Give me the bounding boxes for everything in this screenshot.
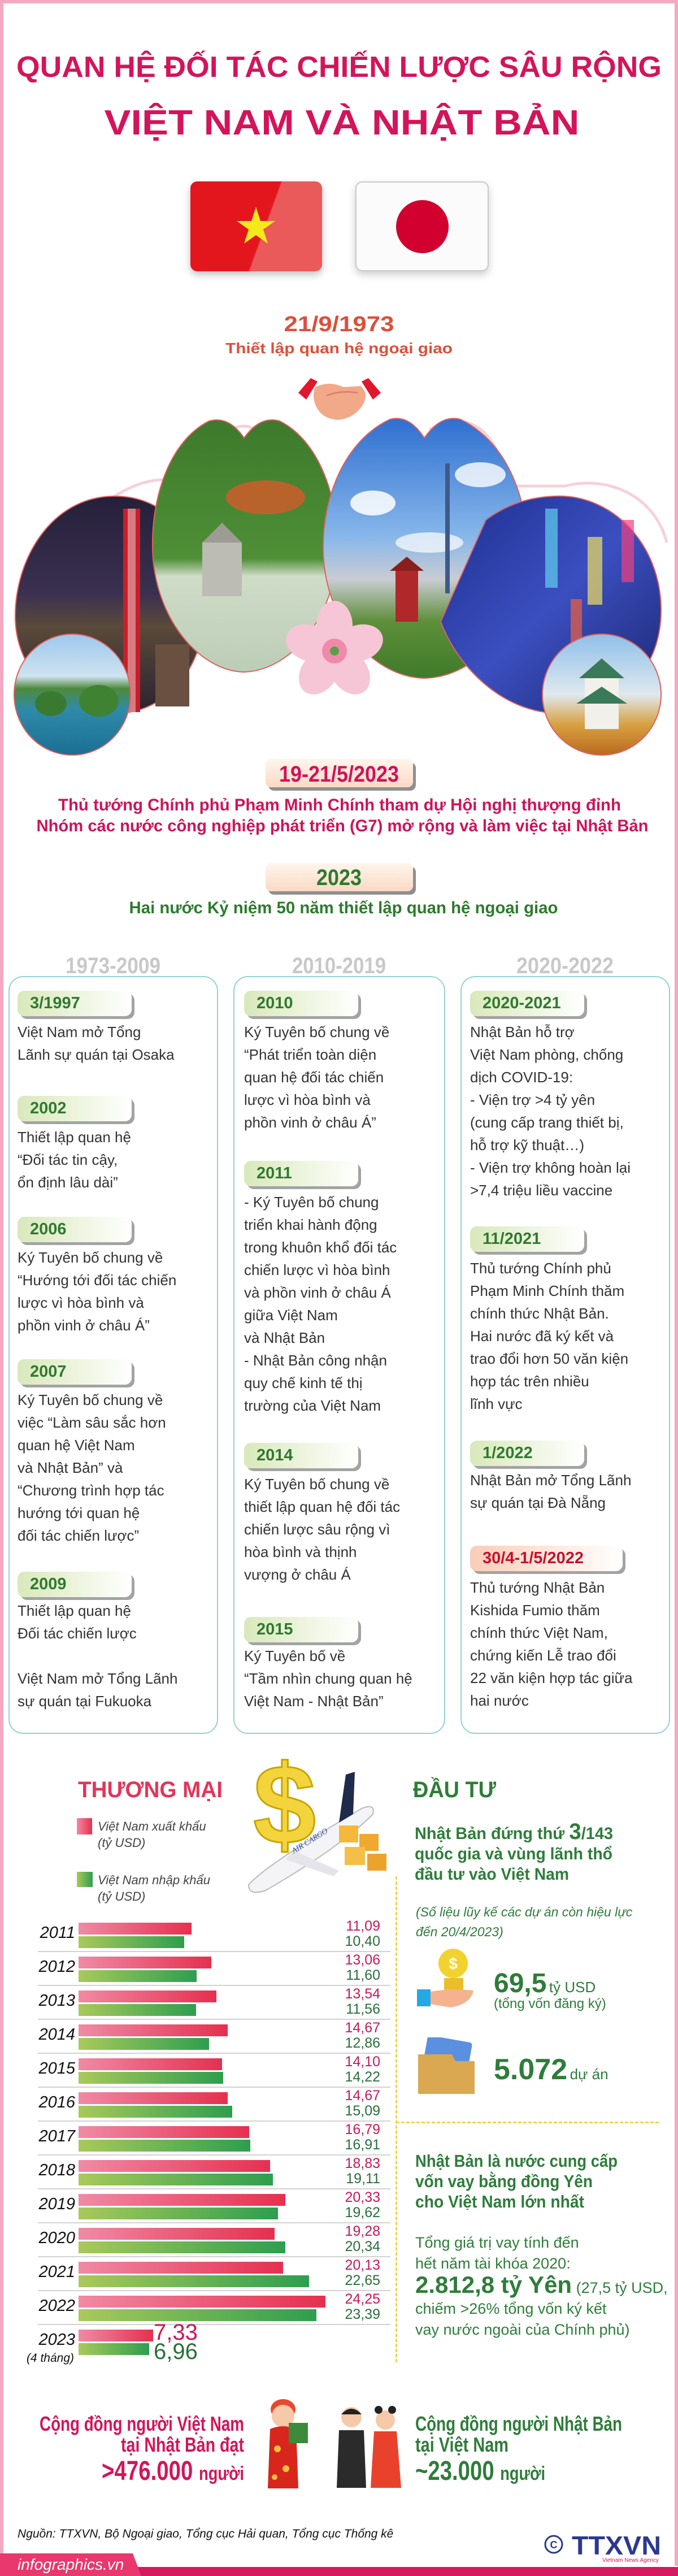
bar chart: trade: 18,83 bbox=[345, 2156, 380, 2171]
photo: Ha Long bay bbox=[14, 634, 131, 755]
text: ODA headline bbox=[415, 2151, 618, 2210]
text: ODA value: vay nước ngoài của Chính phủ) bbox=[415, 2321, 630, 2338]
bar chart: trade: 20,13 bbox=[345, 2257, 380, 2273]
stat: registered capital bbox=[494, 1968, 606, 2011]
event: 2011: 2011 bbox=[257, 1164, 292, 1182]
text: “Đối tác tin cậy, bbox=[18, 1151, 118, 1168]
text: anniversary: Hai nước Kỷ niệm 50 năm thiết lập quan hệ ngoại giao bbox=[129, 899, 558, 917]
legend: import: Việt Nam nhập khẩu bbox=[98, 1873, 210, 1887]
text: và Nhật Bản” và bbox=[18, 1459, 123, 1476]
bar chart: trade: 14,10 bbox=[345, 2054, 380, 2070]
event: 2010 bbox=[244, 991, 358, 1016]
event: 1/2022 bbox=[470, 1441, 584, 1466]
text: Japanese community in Vietnam bbox=[415, 2412, 622, 2484]
panel: 1973-2009 bbox=[8, 976, 218, 1734]
bar chart: trade: 2015 bbox=[38, 2059, 75, 2078]
bar chart: trade: 20,33 bbox=[345, 2189, 380, 2205]
text: ODA value: chiếm >26% tổng vốn ký kết bbox=[415, 2300, 606, 2317]
text: >7,4 triệu liều vaccine bbox=[470, 1182, 612, 1199]
text: “Chương trình hợp tác bbox=[18, 1482, 164, 1499]
text: Ký Tuyên bố chung về bbox=[18, 1249, 163, 1266]
event: 2007: 2007 bbox=[30, 1363, 67, 1381]
text: việc “Làm sâu sắc hơn bbox=[18, 1414, 166, 1431]
event: 2014: 2014 bbox=[257, 1446, 293, 1464]
source note: Nguồn: TTXVN, Bộ Ngoại giao, Tổng cục Hải quan, Tổng cục Thống kê bbox=[18, 2527, 393, 2540]
legend: export: Việt Nam xuất khẩu bbox=[98, 1819, 206, 1833]
text: ODA value: 2.812,8 tỷ Yên (27,5 tỷ USD, bbox=[415, 2271, 668, 2298]
bar chart: trade: 2020 bbox=[38, 2229, 75, 2247]
event: 2007 bbox=[18, 1359, 132, 1385]
bar chart: trade: 2018 bbox=[38, 2161, 75, 2179]
text: hỗ trợ kỹ thuật…) bbox=[470, 1137, 584, 1153]
text: trường của Việt Nam bbox=[244, 1397, 381, 1414]
text: ổn định lâu dài” bbox=[18, 1174, 118, 1191]
text: Việt Nam phòng, chống bbox=[470, 1046, 623, 1063]
text: Ký Tuyên bố về bbox=[244, 1647, 345, 1664]
bar chart: trade: 22,65 bbox=[345, 2273, 380, 2288]
separators bbox=[38, 1951, 390, 1952]
bar chart: trade: 2023 bbox=[38, 2331, 75, 2349]
logo: TTXVN bbox=[545, 2532, 661, 2564]
flag: Vietnam bbox=[190, 181, 322, 271]
icon: coins in hand bbox=[417, 1949, 473, 2007]
text: Việt Nam mở Tổng Lãnh bbox=[18, 1670, 177, 1687]
text: G7 summit description: Thủ tướng Chính phủ Phạm Minh Chính tham dự Hội nghị thượng đỉnh bbox=[58, 796, 621, 814]
bar chart: trade bbox=[27, 1918, 390, 2365]
text: - Viện trợ không hoàn lại bbox=[470, 1159, 631, 1176]
logo: TTXVN: C bbox=[550, 2539, 557, 2551]
text: sự quán tại Fukuoka bbox=[18, 1693, 151, 1710]
icon: coins in hand: $ bbox=[449, 1955, 458, 1972]
timeline period headings bbox=[66, 953, 614, 978]
bar chart: trade: 2013 bbox=[38, 1992, 75, 2010]
text: vượng ở châu Á bbox=[244, 1566, 351, 1583]
event: 2009: 2009 bbox=[30, 1575, 67, 1593]
event: 2010: 2010 bbox=[257, 994, 293, 1012]
bar chart: trade: 12,86 bbox=[345, 2035, 380, 2051]
title bbox=[16, 50, 662, 142]
text: Ký Tuyên bố chung về bbox=[244, 1476, 389, 1493]
photo collage bbox=[14, 418, 668, 756]
text: lược vì hòa bình và bbox=[18, 1294, 144, 1311]
note: cumulative data: (Số liệu lũy kế các dự án còn hiệu lực bbox=[416, 1905, 632, 1919]
text: thiết lập quan hệ đối tác bbox=[244, 1498, 400, 1515]
text: “Hướng tới đối tác chiến bbox=[18, 1272, 176, 1289]
text: quy chế kinh tế thị bbox=[244, 1374, 363, 1391]
title: QUAN HỆ ĐỐI TÁC CHIẾN LƯỢC SÂU RỘNG bbox=[16, 50, 662, 84]
photo: Tokyo skyline bbox=[323, 418, 527, 678]
stat: projects: 5.072 dự án bbox=[494, 2053, 609, 2086]
text: Ký Tuyên bố chung về bbox=[18, 1391, 163, 1408]
text: Japan rank bbox=[415, 1819, 613, 1882]
bar chart: trade: 2014 bbox=[38, 2026, 75, 2044]
text: lược vì hòa bình và bbox=[244, 1091, 371, 1108]
text: giữa Việt Nam bbox=[244, 1307, 338, 1324]
photo: Hanoi Hoan Kiem bbox=[153, 420, 337, 672]
divider lines: investment bbox=[395, 1876, 397, 2362]
text: quan hệ Việt Nam bbox=[18, 1437, 135, 1454]
text: Hai nước đã ký kết và bbox=[470, 1328, 614, 1345]
text: ODA headline: vốn vay bằng đồng Yên bbox=[415, 2171, 593, 2191]
panel: 2010-2019 bbox=[233, 976, 445, 1734]
event: 2002 bbox=[18, 1096, 132, 1121]
bar chart: trade: 11,56 bbox=[346, 2001, 380, 2017]
event: 2002: 2002 bbox=[30, 1099, 67, 1117]
bar chart: trade: 16,91 bbox=[345, 2137, 380, 2153]
text: sự quán tại Đà Nẵng bbox=[470, 1494, 606, 1511]
text: “Phát triển toàn diện bbox=[244, 1046, 376, 1063]
bar chart: trade: 14,67 bbox=[345, 2020, 380, 2036]
date: diplomatic relations bbox=[225, 313, 453, 357]
event: 2014 bbox=[244, 1443, 358, 1468]
text: Thiết lập quan hệ bbox=[18, 1129, 131, 1146]
text: - Nhật Bản công nhận bbox=[244, 1352, 387, 1369]
bar chart: trade: 2012 bbox=[38, 1958, 75, 1976]
event: 11/2021: 11/2021 bbox=[483, 1230, 541, 1248]
text: ODA value bbox=[415, 2234, 668, 2338]
bar chart: trade: 13,06 bbox=[345, 1952, 380, 1968]
text: đối tác chiến lược” bbox=[18, 1527, 139, 1544]
bar chart: trade: 2021 bbox=[38, 2263, 75, 2281]
text: Japan rank: quốc gia và vùng lãnh thổ bbox=[415, 1845, 612, 1863]
text: 22 văn kiện hợp tác giữa bbox=[470, 1669, 632, 1686]
text: Đối tác chiến lược bbox=[18, 1625, 137, 1642]
timeline period headings: 1973-2009 bbox=[66, 953, 160, 978]
event: 2009 bbox=[18, 1572, 132, 1597]
text: Nhóm các nước công nghiệp phát triển (G7) mở rộng và làm việc tại Nhật Bản bbox=[36, 817, 649, 835]
text: lĩnh vực bbox=[470, 1395, 523, 1412]
event: 11/2021 bbox=[470, 1226, 584, 1252]
text: hai nước bbox=[470, 1692, 529, 1709]
text: Thủ tướng Chính phủ bbox=[470, 1260, 611, 1277]
text: chứng kiến Lễ trao đổi bbox=[470, 1647, 616, 1664]
bar chart: trade: 24,25 bbox=[345, 2291, 380, 2307]
bar chart: trade: 2016 bbox=[38, 2093, 75, 2111]
date: 2023 anniversary bbox=[266, 863, 413, 891]
text: phồn vinh ở châu Á” bbox=[244, 1114, 376, 1131]
bar chart: trade: (4 tháng) bbox=[27, 2352, 74, 2365]
bar chart: trade: 15,09 bbox=[345, 2103, 380, 2119]
bars bbox=[79, 1923, 192, 1935]
icon: dollar and cargo plane bbox=[248, 1752, 386, 1893]
heading: investment: ĐẦU TƯ bbox=[413, 1776, 497, 1802]
event: 2020-2021 bbox=[470, 991, 584, 1016]
date: diplomatic relations: Thiết lập quan hệ ngoại giao bbox=[225, 340, 453, 357]
legend: import bbox=[77, 1872, 210, 1903]
bar chart: trade: 2019 bbox=[38, 2195, 75, 2213]
icon: dollar and cargo plane: AIR CARGO bbox=[290, 1827, 329, 1856]
year labels: 2011 bbox=[40, 1924, 75, 1942]
event: 2011 bbox=[244, 1161, 358, 1186]
event: 2006 bbox=[18, 1217, 132, 1242]
event: 2020-2021: 2020-2021 bbox=[483, 994, 561, 1012]
bar chart: trade: 23,39 bbox=[345, 2306, 380, 2322]
text: Ký Tuyên bố chung về bbox=[244, 1024, 389, 1040]
date: G7 summit bbox=[266, 759, 413, 787]
text: hòa bình và thịnh bbox=[244, 1543, 357, 1560]
text: chiến lược sâu rộng vì bbox=[244, 1521, 390, 1538]
photo: Osaka castle bbox=[542, 634, 661, 755]
footer: infographics.vn tab: infographics.vn bbox=[18, 2556, 124, 2573]
text: quan hệ đối tác chiến bbox=[244, 1069, 384, 1086]
text: Vietnamese community in Japan bbox=[40, 2412, 244, 2484]
text: Việt Nam mở Tổng bbox=[18, 1024, 141, 1040]
text: ODA value: Tổng giá trị vay tính đến bbox=[415, 2234, 579, 2251]
text: - Ký Tuyên bố chung bbox=[244, 1194, 379, 1211]
text: và Nhật Bản bbox=[244, 1329, 325, 1346]
event: 30/4-1/5/2022 bbox=[470, 1546, 623, 1571]
heading: trade: THƯƠNG MẠI bbox=[78, 1777, 223, 1802]
event: 2006: 2006 bbox=[30, 1220, 67, 1238]
text: “Tầm nhìn chung quan hệ bbox=[244, 1670, 412, 1687]
text: chính thức Nhật Bản. bbox=[470, 1305, 609, 1322]
text: Japanese community in Vietnam: tại Việt Nam bbox=[415, 2433, 508, 2456]
date: diplomatic relations: 21/9/1973 bbox=[284, 313, 394, 336]
text: 2023 bbox=[316, 865, 362, 890]
footer: infographics.vn tab bbox=[0, 2553, 141, 2576]
text: hợp tác trên nhiều bbox=[470, 1373, 589, 1390]
text: (cung cấp trang thiết bị, bbox=[470, 1114, 624, 1131]
bar chart: trade: 2017 bbox=[38, 2127, 75, 2145]
bar chart: trade: 14,22 bbox=[345, 2069, 380, 2085]
text: 19-21/5/2023 bbox=[279, 762, 399, 787]
bar chart: trade: 19,28 bbox=[345, 2223, 380, 2239]
note: cumulative data bbox=[416, 1905, 632, 1939]
values bbox=[345, 1918, 380, 1949]
event: 3/1997 bbox=[18, 991, 132, 1016]
text: - Viện trợ >4 tỷ yên bbox=[470, 1091, 595, 1108]
title: VIỆT NAM VÀ NHẬT BẢN bbox=[104, 103, 580, 142]
bar chart: trade: 2022 bbox=[38, 2297, 75, 2315]
panel: 2020-2022 bbox=[460, 976, 670, 1734]
stat: registered capital: (tổng vốn đăng ký) bbox=[494, 1996, 606, 2011]
timeline period headings: 2020-2022 bbox=[516, 953, 614, 978]
bar chart: trade: 19,62 bbox=[345, 2205, 380, 2221]
bar chart: trade: 20,34 bbox=[345, 2239, 380, 2254]
text: dịch COVID-19: bbox=[470, 1069, 573, 1086]
legend: export: (tỷ USD) bbox=[98, 1836, 145, 1850]
background sakura outline bbox=[113, 422, 667, 543]
event: 1/2022: 1/2022 bbox=[483, 1444, 533, 1462]
text: Nhật Bản hỗ trợ bbox=[470, 1024, 575, 1040]
text: trong khuôn khổ đối tác bbox=[244, 1239, 397, 1256]
bar chart: trade: 6,96 bbox=[154, 2339, 198, 2364]
text: ODA headline: Nhật Bản là nước cung cấp bbox=[415, 2151, 618, 2171]
icon: Japanese couple bbox=[337, 2406, 401, 2488]
bar chart: trade: 13,54 bbox=[345, 1986, 380, 2002]
text: và phồn vinh ở châu Á bbox=[244, 1284, 391, 1301]
text: triển khai hành động bbox=[244, 1216, 377, 1233]
text: chiến lược vì hòa bình bbox=[244, 1261, 390, 1278]
bar chart: trade: 7,33 bbox=[154, 2320, 198, 2345]
legend: export bbox=[77, 1818, 206, 1850]
values: 11,09 bbox=[346, 1918, 380, 1934]
bar chart: trade: 19,11 bbox=[346, 2171, 380, 2187]
footer band bbox=[0, 2567, 678, 2576]
legend: import: (tỷ USD) bbox=[98, 1889, 145, 1903]
event: 2015: 2015 bbox=[257, 1620, 293, 1638]
flag: Japan bbox=[355, 181, 489, 271]
icon: folder bbox=[418, 2037, 475, 2094]
text: hướng tới quan hệ bbox=[18, 1504, 140, 1521]
icon: Vietnamese woman bbox=[268, 2399, 308, 2488]
icon: handshake bbox=[298, 378, 381, 420]
icon: sakura flower bbox=[281, 601, 388, 702]
photo: night city bbox=[15, 496, 205, 713]
timeline period headings: 2010-2019 bbox=[292, 953, 386, 978]
photo: neon street bbox=[441, 496, 661, 713]
text: Nhật Bản mở Tổng Lãnh bbox=[470, 1472, 631, 1489]
text: Phạm Minh Chính thăm bbox=[470, 1282, 624, 1299]
text: Việt Nam - Nhật Bản” bbox=[244, 1693, 384, 1710]
text: trao đổi hơn 50 văn kiện bbox=[470, 1350, 628, 1367]
bar chart: trade: 14,67 bbox=[345, 2088, 380, 2104]
event: 30/4-1/5/2022: 30/4-1/5/2022 bbox=[483, 1549, 584, 1567]
stat: registered capital: 69,5 tỷ USD bbox=[494, 1968, 596, 1998]
text: phồn vinh ở châu Á” bbox=[18, 1317, 150, 1334]
logo: TTXVN: Vietnam News Agency bbox=[602, 2557, 659, 2564]
values: 10,40 bbox=[345, 1933, 380, 1949]
text: chính thức Việt Nam, bbox=[470, 1624, 608, 1641]
bar chart: trade: 11,60 bbox=[346, 1967, 380, 1983]
event: 2015 bbox=[244, 1617, 358, 1642]
text: Japan rank: Nhật Bản đứng thứ 3/143 bbox=[415, 1819, 613, 1844]
text: Lãnh sự quán tại Osaka bbox=[18, 1046, 175, 1063]
text: Kishida Fumio thăm bbox=[470, 1602, 600, 1619]
bar chart: trade: 16,79 bbox=[345, 2122, 380, 2137]
text: Thiết lập quan hệ bbox=[18, 1602, 131, 1619]
text: Thủ tướng Nhật Bản bbox=[470, 1579, 605, 1596]
event: 3/1997: 3/1997 bbox=[30, 994, 80, 1012]
note: cumulative data: đến 20/4/2023) bbox=[416, 1924, 503, 1939]
text: ODA value: hết năm tài khóa 2020: bbox=[415, 2255, 571, 2272]
